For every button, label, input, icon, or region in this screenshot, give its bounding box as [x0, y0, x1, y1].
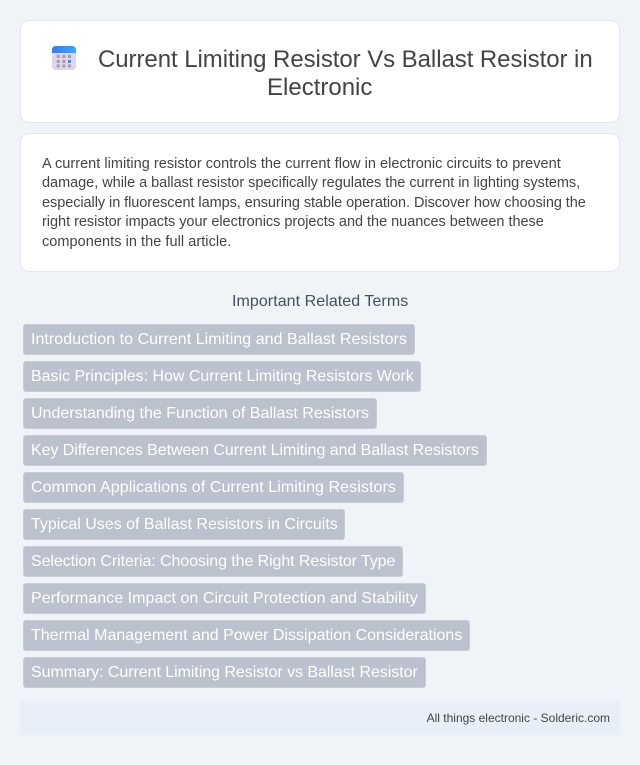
tag: performance impact: Performance Impact on Circuit Protection and Stability: [31, 590, 418, 607]
tag: thermal management: [23, 620, 470, 651]
panel: introduction: [20, 133, 620, 272]
tag: selection criteria: Selection Criteria: Choosing the Right Resistor Type: [31, 553, 395, 570]
tag: common applications: Common Applications of Current Limiting Resistors: [31, 479, 396, 496]
tag: introduction: [23, 324, 415, 355]
tag: typical uses: Typical Uses of Ballast Resistors in Circuits: [31, 516, 338, 533]
tag: introduction: Introduction to Current Limiting and Ballast Resistors: [31, 331, 407, 348]
title: Electronic: [267, 74, 372, 101]
text block: introduction: right resistor impacts your electronics projects and the nuances between these: [42, 214, 544, 230]
tag: summary: [23, 657, 426, 688]
tag: basic principles: Basic Principles: How Current Limiting Resistors Work: [31, 368, 414, 385]
footer text: All things electronic - Solderic.com: [427, 711, 610, 725]
tag: typical uses: [23, 509, 345, 540]
text block: introduction: [42, 156, 586, 250]
tag: summary: Summary: Current Limiting Resistor vs Ballast Resistor: [31, 664, 418, 681]
tag: key differences: [23, 435, 487, 466]
heading: important related terms: Important Related Terms: [232, 293, 408, 310]
tag: performance impact: [23, 583, 426, 614]
footer: [20, 701, 620, 735]
panel: title card: [20, 20, 620, 123]
tag: selection criteria: [23, 546, 403, 577]
list: related terms: [23, 324, 487, 688]
title: Current Limiting Resistor Vs Ballast Resistor in: [98, 46, 593, 73]
tag: key differences: Key Differences Between Current Limiting and Ballast Resistors: [31, 442, 479, 459]
text block: introduction: especially in fluorescent lamps, ensuring stable operation. Discover how choosing the: [42, 195, 586, 211]
icon: calendar: [52, 46, 76, 70]
tag: function of ballast: [23, 398, 377, 429]
text block: introduction: damage, while a ballast resistor specifically regulates the current in lighting systems,: [42, 175, 580, 191]
tag: function of ballast: Understanding the Function of Ballast Resistors: [31, 405, 369, 422]
text block: introduction: A current limiting resistor controls the current flow in electronic circuits to prevent: [42, 156, 561, 172]
tag: basic principles: [23, 361, 421, 392]
text block: introduction: components in the full article.: [42, 234, 231, 250]
tag: common applications: [23, 472, 404, 503]
title: [98, 46, 593, 101]
tag: thermal management: Thermal Management and Power Dissipation Considerations: [31, 627, 462, 644]
